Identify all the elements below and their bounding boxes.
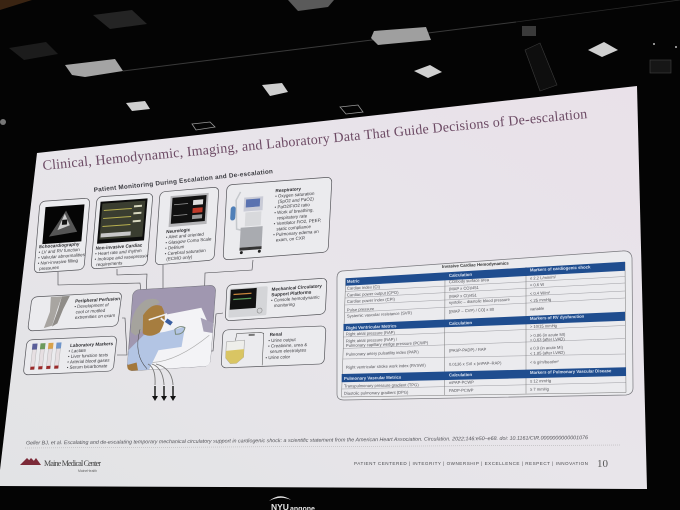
text: cardiac: • Inotrope and vasopressor <box>94 253 149 262</box>
text: neuro: Neurologic <box>166 227 191 234</box>
text: peripheral: extremities on exam <box>75 313 116 320</box>
table text: pulmonary vascular: Diastolic pulmonary gradient (DPG) <box>344 390 409 396</box>
table text: RV metrics <box>346 314 585 370</box>
table text: cardiogenic shock: Systemic vascular resistance (SVR) <box>347 310 413 318</box>
table text: cardiogenic shock: Cardiac index (CI) <box>347 284 381 291</box>
table text: cardiogenic shock: CO/body surface area <box>449 277 490 284</box>
text: respiratory: respiratory rate <box>277 213 308 221</box>
table text: pulmonary vascular <box>344 368 612 396</box>
text: renal: serum electrolytes <box>270 348 307 354</box>
text: peripheral: • Development of <box>74 302 110 309</box>
illustration: patient in bed <box>127 285 216 371</box>
table text: RV metrics: Markers of RV dysfunction <box>530 314 585 321</box>
text: neuro: • Alert and oriented <box>166 231 205 240</box>
table text: cardiogenic shock: variable <box>530 306 545 311</box>
panel: mechanical circulatory support <box>225 278 327 321</box>
text: respiratory: • Oxygen saturation <box>275 191 315 199</box>
citation: Geller BJ, et al. Escalating and de-escalating temporary mechanical circulatory support in cardiogenic shock: a scientific statement from the American Heart Association. Circulation. 2022;146:e50–e68. doi: 10.1161/CIR.0000000000001076 <box>26 435 588 446</box>
panel: non-invasive cardiac <box>91 193 154 269</box>
table text: cardiogenic shock: Cardiac power output (CPO) <box>347 290 399 297</box>
text: MCS: Support Platforms <box>271 290 312 297</box>
text: MCS: Mechanical Circulatory <box>272 283 322 292</box>
table text: RV metrics: < 6 g/m/beat/m² <box>530 359 559 365</box>
table text: pulmonary vascular: Markers of Pulmonary Vascular Disease <box>530 368 612 375</box>
icon: mottled legs <box>44 296 70 328</box>
table text: RV metrics: (PASP-PADP) / RAP <box>449 347 487 353</box>
text: MCS: • Console hemodynamic <box>271 294 320 303</box>
text: echo <box>37 241 87 271</box>
icon: bedside monitor <box>97 198 148 244</box>
table text: pulmonary vascular: PADP-PCWP <box>449 388 474 393</box>
text: echo: • LV and RV function <box>38 247 80 255</box>
header band: section 2 <box>344 312 625 331</box>
icon: blood tubes <box>30 342 62 370</box>
text: neuro: • Cerebral saturation <box>165 248 206 256</box>
table text: RV metrics: Right atrial pressure (RAP) <box>346 330 396 336</box>
table text: cardiogenic shock: < 0.6 W <box>530 282 544 287</box>
text: respiratory: static compliance <box>276 224 312 232</box>
table text: RV metrics: Calculation <box>449 320 473 326</box>
logo: Maine Medical Center: Maine Medical Center <box>44 459 101 468</box>
panel: laboratory markers <box>23 336 117 375</box>
icon: urine bag <box>225 332 264 367</box>
table text: RV metrics: 0.0136 x SVI x (mPAP–RAP) <box>449 360 502 367</box>
text: peripheral: Peripheral Perfusion <box>75 296 121 304</box>
icon: ventilator <box>228 190 265 255</box>
text: respiratory: Respiratory <box>275 186 302 193</box>
text: lab: • Lactate <box>68 348 87 354</box>
table text: cardiogenic shock: Pulse pressure <box>347 306 375 312</box>
text: renal: Renal <box>270 332 282 337</box>
table text: pulmonary vascular: mPAP-PCWP <box>449 380 474 385</box>
table text: pulmonary vascular: ≥ 12 mmHg <box>530 378 552 383</box>
text: peripheral <box>73 296 121 320</box>
text: cardiac: requirements <box>96 260 123 267</box>
text: echo: • Non-invasive filling <box>38 258 79 266</box>
text: echo: • Valvular abnormalities <box>38 252 86 260</box>
table text: cardiogenic shock: Calculation <box>449 272 473 278</box>
table text: RV metrics: Right ventricular stroke work index (RVSWI) <box>346 363 426 370</box>
table text: RV metrics: Pulmonary capillary wedge pressure (PCWP) <box>346 340 429 348</box>
table text: RV metrics: Right Ventricular Metrics <box>346 323 397 330</box>
logo: NYU Langone <box>269 496 315 510</box>
icon: MCS console <box>228 286 268 318</box>
panel: renal <box>221 326 326 368</box>
table text: RV metrics: ≤ 0.9 (in acute MI) <box>530 345 564 351</box>
slide background <box>0 86 647 489</box>
table text: RV metrics: Pulmonary artery pulsatility index (PAPi) <box>346 349 419 357</box>
text: peripheral: cool or mottled <box>75 308 106 314</box>
table text: RV metrics: > 0.63 (after LVAD) <box>530 336 565 342</box>
table text: RV metrics: > 10/15 mmHg <box>530 323 558 329</box>
text: cardiac <box>94 242 150 267</box>
text: cardiac: Non-invasive Cardiac <box>95 242 143 251</box>
text: neuro <box>164 225 213 262</box>
text: lab: Laboratory Markers <box>70 341 114 348</box>
text: renal: • Urine color <box>265 354 291 360</box>
panel: respiratory <box>223 177 332 260</box>
table text: RV metrics: Right atrial pressure (RAP) / <box>346 337 398 343</box>
table text: RV metrics: < 1.85 (after LVAD) <box>530 350 565 356</box>
ceiling fixtures <box>0 0 680 130</box>
table text: cardiogenic shock: Cardiac power index (CPI) <box>347 296 396 304</box>
table text: cardiogenic shock: < 0.4 W/m² <box>530 290 551 296</box>
text: renal: • Urine output <box>268 337 297 343</box>
text: lab: • Arterial blood gases <box>67 358 111 365</box>
panel: peripheral perfusion <box>28 292 122 331</box>
logo: Maine Medical Center: MaineHealth <box>78 469 97 473</box>
table text: pulmonary vascular: Pulmonary Vascular Metrics <box>344 375 402 381</box>
text: lab <box>66 341 114 370</box>
text: respiratory: • Ventilator FiO2, PEEP, <box>274 218 322 226</box>
text: neuro: • Delirium <box>165 244 185 251</box>
table grid <box>342 262 626 397</box>
table text: cardiogenic shock: Metric <box>347 278 360 284</box>
text: respiratory <box>273 185 323 243</box>
text: echo: pressures <box>39 265 60 271</box>
text: neuro: (ECMO only) <box>166 254 193 262</box>
table text: cardiogenic shock: ≤ 2.2 L/min/m² <box>530 274 557 281</box>
table text: cardiogenic shock: systolic – diastolic blood pressure <box>449 297 511 305</box>
text: lab: • Serum bicarbonate <box>66 363 108 370</box>
text: lab: • Liver function tests <box>68 352 109 359</box>
footer values: PATIENT CENTERED | INTEGRITY | OWNERSHIP | EXCELLENCE | RESPECT | INNOVATION <box>354 461 588 466</box>
heading: patient monitoring: Patient Monitoring During Escalation and De-escalation <box>93 168 273 194</box>
text: respiratory: • Pulmonary edema on <box>273 229 319 237</box>
panel: invasive cardiac hemodynamics table <box>337 251 633 400</box>
table text: pulmonary vascular: Calculation <box>449 372 473 377</box>
header band: section 1 <box>346 262 625 286</box>
text: cardiac: • Heart rate and rhythm <box>95 248 142 256</box>
cables and arrows <box>148 364 176 401</box>
page number: 10 <box>597 458 608 470</box>
text: renal <box>265 331 308 360</box>
text: MCS: monitoring <box>274 302 295 308</box>
text: respiratory: • PaO2/FiO2 ratio <box>274 202 311 210</box>
text: MCS <box>271 283 322 308</box>
text: renal: • Creatinine, urea & <box>268 342 307 349</box>
connector lines <box>58 260 253 355</box>
icon: neuro monitor <box>169 193 209 227</box>
text: respiratory: (SpO2 and PaO2) <box>278 196 314 204</box>
table text: pulmonary vascular: Transpulmonary pressure gradient (TPG) <box>344 382 419 388</box>
icon: echo image <box>42 204 84 244</box>
text: respiratory: • Work of breathing, <box>274 207 314 215</box>
table text: cardiogenic shock: (MAP x CI)/451 <box>449 293 478 299</box>
table text: cardiogenic shock <box>347 264 591 318</box>
table text: cardiogenic shock: < 25 mmHg <box>530 297 552 303</box>
table text: cardiogenic shock: Markers of cardiogenic shock <box>530 264 591 272</box>
logo: Maine Medical Center <box>20 458 101 473</box>
title: Clinical, Hemodynamic, Imaging, and Laboratory Data That Guide Decisions of De-escalation <box>42 107 588 174</box>
table text: cardiogenic shock: (MAP x CO)/451 <box>449 285 480 291</box>
table text: RV metrics: > 0.86 (in acute MI) <box>530 332 566 338</box>
table title: Invasive Cardiac Hemodynamics <box>442 260 509 269</box>
panel: neurologic <box>155 187 219 265</box>
text: neuro: • Glasgow Coma Scale <box>165 236 212 245</box>
text: echo: Echocardiography <box>39 241 80 249</box>
table text: pulmonary vascular: ≥ 7 mmHg <box>530 386 550 392</box>
table text: cardiogenic shock: [(MAP – CVP) / CO] x 80 <box>449 307 495 314</box>
panel: echocardiography <box>34 198 90 273</box>
header band: section 3 <box>342 367 626 382</box>
text: respiratory: exam, on CXR <box>276 235 306 243</box>
